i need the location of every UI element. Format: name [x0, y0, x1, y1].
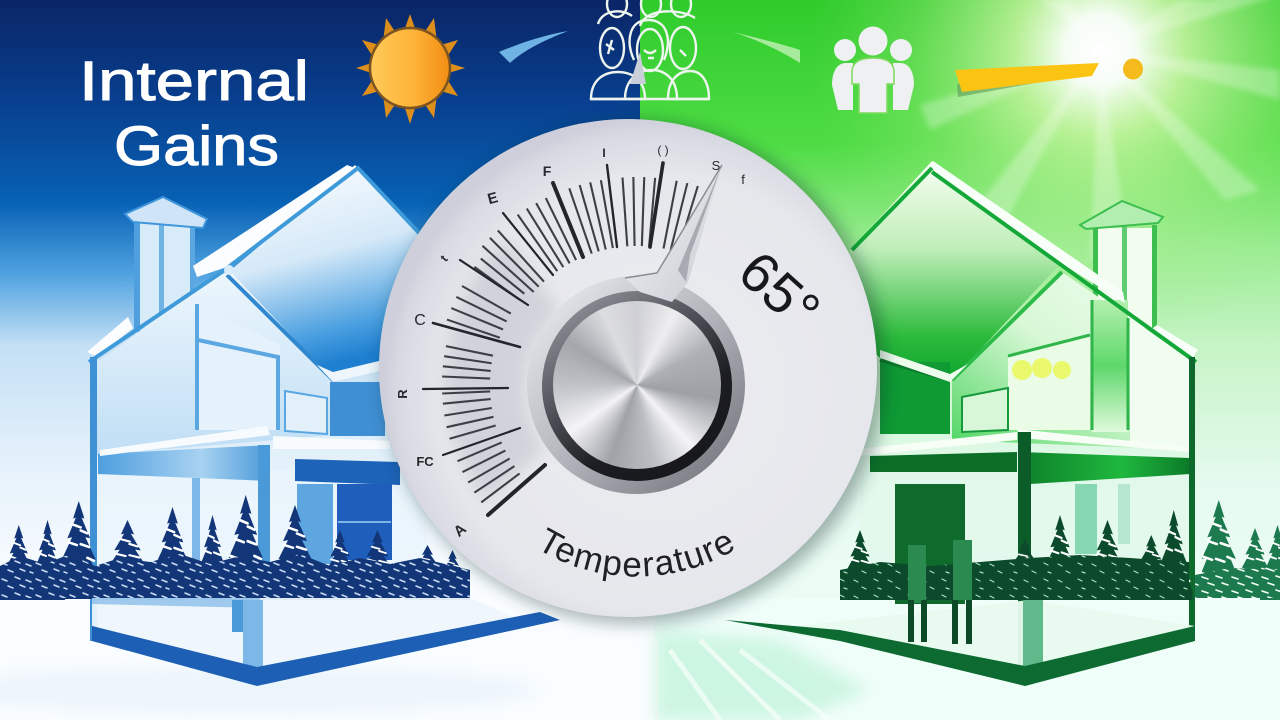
beam blue — [98, 445, 270, 481]
right sky background — [640, 0, 1280, 720]
pines green — [840, 510, 1192, 600]
snow ground left — [0, 598, 655, 720]
icon: sun — [356, 14, 465, 124]
left sky background — [0, 0, 640, 720]
chimney blue — [125, 197, 207, 332]
icon: yellow dot — [1123, 58, 1143, 80]
major tick marks — [423, 163, 663, 515]
icon: white people group — [832, 26, 914, 113]
scale labels: C — [414, 312, 426, 329]
scale labels: ( ) — [657, 143, 669, 157]
pines blue — [0, 495, 470, 600]
scale shaded sector — [445, 240, 560, 500]
scale labels: S — [712, 158, 721, 173]
left wall blue — [90, 357, 97, 641]
scale labels — [395, 143, 745, 541]
minor tick marks — [442, 177, 708, 502]
pointer — [625, 165, 722, 302]
front wall upper green — [952, 272, 1190, 450]
lower glass blue — [97, 470, 427, 600]
scale labels: F — [543, 163, 552, 179]
glass floor blue — [92, 598, 560, 686]
scale labels: R — [395, 389, 410, 399]
pines right of house — [1195, 500, 1280, 600]
lower interior green — [860, 470, 1195, 600]
snow ground right — [655, 598, 1280, 720]
ceiling lights — [1012, 358, 1071, 380]
arrow: green swoosh — [733, 32, 800, 63]
beam green — [870, 452, 1017, 472]
value label: 65 degrees: 65° — [727, 239, 832, 342]
house: blue left — [0, 165, 560, 686]
large gable blue — [225, 165, 425, 380]
front wall upper blue — [97, 268, 333, 455]
large gable green — [850, 161, 1062, 380]
tree band right of house — [1195, 568, 1280, 598]
title: Internal Gains: Gains — [114, 114, 279, 177]
scale labels: f — [741, 172, 745, 187]
title: Internal Gains — [79, 49, 309, 177]
scale labels: I — [602, 146, 606, 160]
arrow: blue swoosh — [499, 31, 568, 63]
icon: outlined people group — [591, 0, 709, 99]
scale labels: A — [450, 520, 470, 541]
thermostat dial — [379, 119, 877, 617]
tree band blue — [0, 554, 470, 598]
arrow: yellow bar — [955, 63, 1099, 97]
roof snow green — [932, 161, 1198, 357]
scale labels: FC — [416, 454, 434, 469]
scale labels: E — [486, 189, 500, 208]
tree band green — [840, 555, 1189, 600]
dial shadow — [382, 120, 886, 624]
glass floor green — [725, 600, 1195, 686]
floor snow blue — [100, 426, 270, 456]
curved label: Temperature: Temperature — [544, 527, 734, 582]
title: Internal Gains: Internal — [79, 49, 309, 112]
metal knob — [553, 301, 721, 469]
chimney green — [1080, 201, 1163, 330]
floor snow green — [857, 432, 1017, 456]
indoor people — [908, 540, 972, 603]
scale labels: t — [437, 252, 451, 264]
right wall green — [1189, 357, 1195, 641]
knob ring — [527, 165, 745, 494]
roof snow blue — [87, 165, 355, 357]
house: green right — [725, 161, 1280, 686]
